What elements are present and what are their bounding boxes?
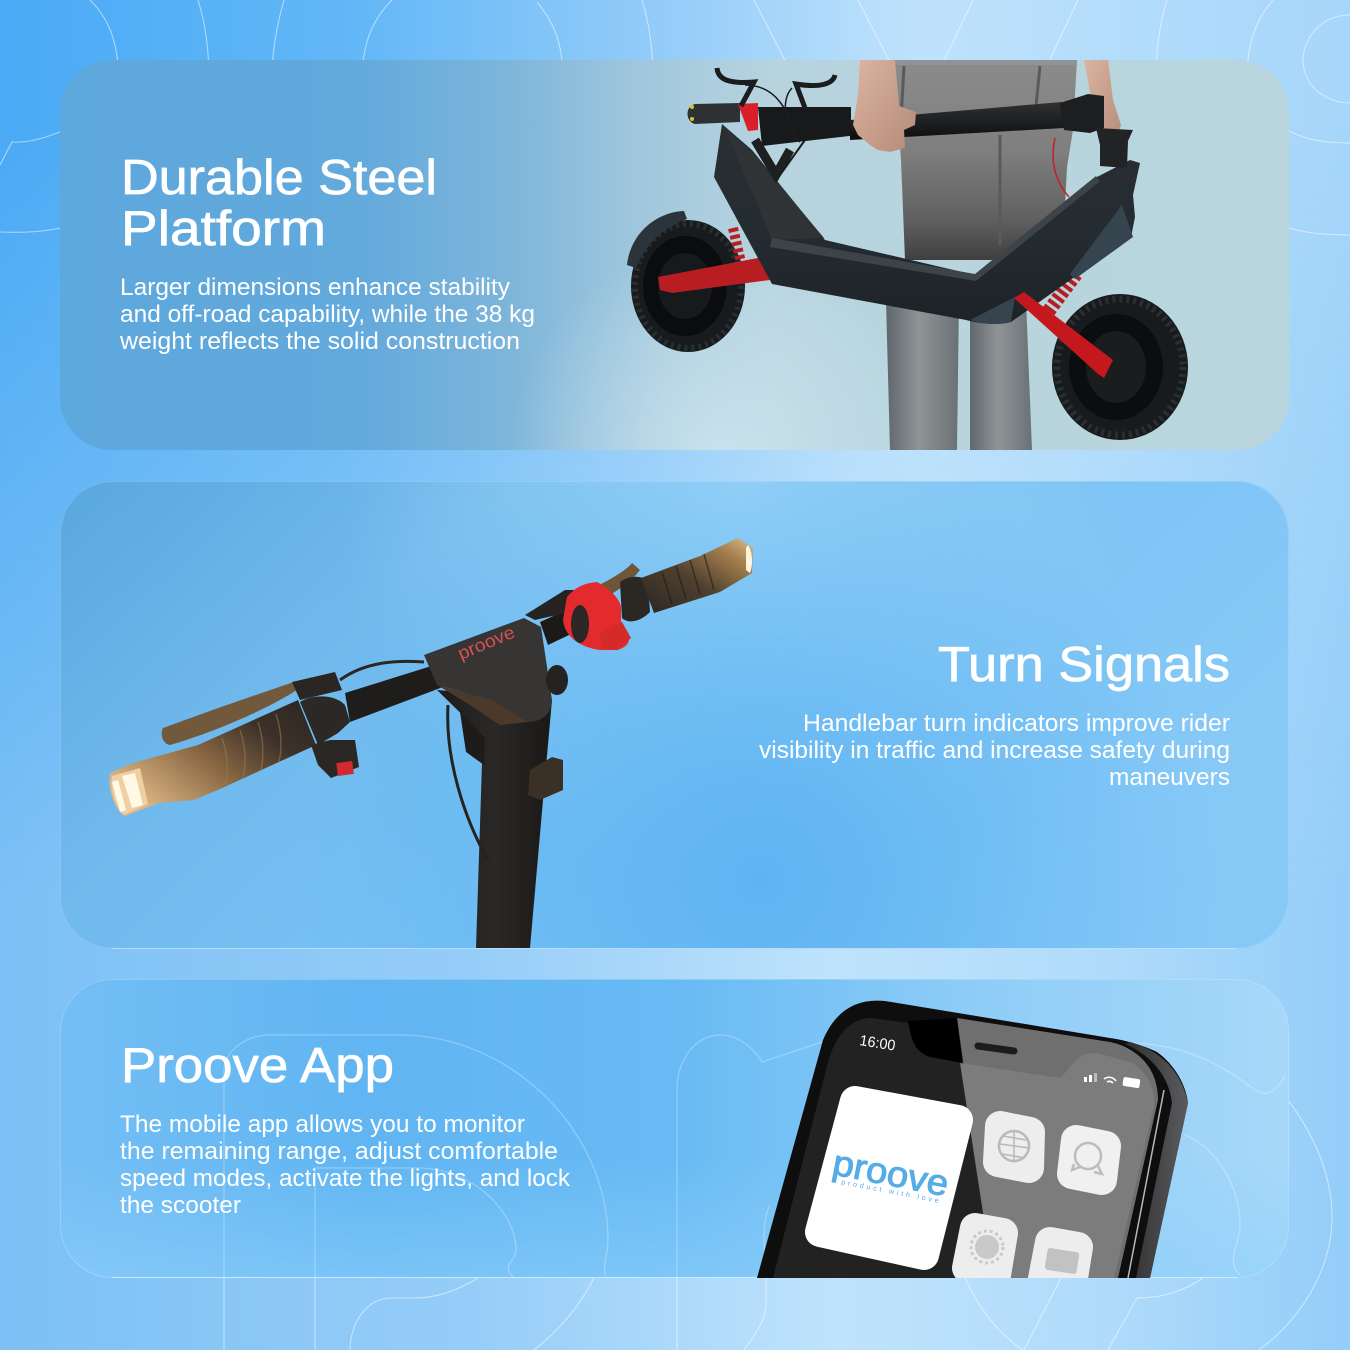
- description: weight reflects the solid construction: [119, 328, 520, 355]
- left lever: [162, 682, 300, 745]
- deck: [714, 124, 1140, 324]
- description: Larger dimensions enhance stability: [120, 274, 510, 301]
- app icon: chat: [1072, 1140, 1106, 1180]
- status icons: [1084, 1073, 1141, 1088]
- description: maneuvers: [1109, 764, 1230, 791]
- rear wheel and fender: [627, 211, 745, 352]
- front spring: [1048, 274, 1076, 312]
- phone: [757, 1001, 1188, 1290]
- front arm: [1014, 292, 1113, 378]
- cable to brake: [340, 661, 424, 680]
- handlebar photo: [109, 538, 753, 948]
- speaker: [978, 1046, 1014, 1051]
- app icon: proove: [820, 1101, 958, 1255]
- app icon: settings: [967, 1228, 1003, 1275]
- right lever: [600, 563, 640, 594]
- description: [120, 1111, 571, 1219]
- brand on plate: proove: [455, 622, 518, 664]
- stem: [437, 690, 552, 948]
- title: Turn Signals: [938, 638, 1230, 692]
- deck underside accents: [970, 205, 1133, 324]
- phone body: [757, 1001, 1188, 1278]
- deck tread: [747, 179, 824, 240]
- clock: 16:00: [858, 1032, 897, 1055]
- scooter photo held by a person: [627, 60, 1188, 450]
- suspension spring: [733, 228, 745, 280]
- screen: [773, 1018, 1154, 1278]
- panel: turn signals: [60, 481, 1289, 949]
- left hand gripping the bar: [853, 60, 916, 152]
- handlebar: [687, 68, 1133, 197]
- description: visibility in traffic and increase safety during: [759, 737, 1230, 764]
- description: [119, 274, 535, 355]
- cable: [446, 704, 480, 848]
- grip light: [112, 768, 148, 815]
- description: The mobile app allows you to monitor: [120, 1111, 525, 1138]
- app icon: globe: [998, 1126, 1030, 1168]
- title: Proove App: [121, 1039, 394, 1093]
- description: [759, 710, 1230, 791]
- panel: durable steel platform: [60, 60, 1289, 450]
- app icon: contact card: [1042, 1242, 1080, 1290]
- panel: proove app: [60, 979, 1289, 1290]
- face plate: [424, 618, 552, 722]
- metal side band: [1125, 1042, 1188, 1278]
- screen glare: [957, 1018, 1158, 1278]
- app logo tagline: product with love: [841, 1179, 941, 1205]
- bar right: [540, 613, 569, 645]
- description: and off-road capability, while the 38 kg: [120, 301, 535, 328]
- description: the remaining range, adjust comfortable: [120, 1138, 558, 1165]
- bar left: [345, 663, 443, 722]
- title: Durable Steel: [121, 151, 437, 205]
- right grip: [641, 538, 753, 613]
- left collar: [300, 696, 350, 745]
- description: speed modes, activate the lights, and lock: [120, 1165, 571, 1192]
- rear swing arm: [658, 257, 770, 293]
- left grip: [109, 700, 316, 816]
- person jeans and legs: [886, 60, 1121, 450]
- title second line: Platform: [121, 202, 326, 256]
- clamp: [528, 757, 563, 800]
- switch: [311, 740, 359, 778]
- app logo wordmark: proove: [829, 1142, 952, 1204]
- front wheel: [1052, 294, 1188, 440]
- dial: [546, 665, 568, 695]
- right collar: [620, 577, 650, 621]
- description: Handlebar turn indicators improve rider: [803, 710, 1230, 737]
- red turn signal switch: [563, 582, 631, 650]
- description: the scooter: [120, 1192, 241, 1219]
